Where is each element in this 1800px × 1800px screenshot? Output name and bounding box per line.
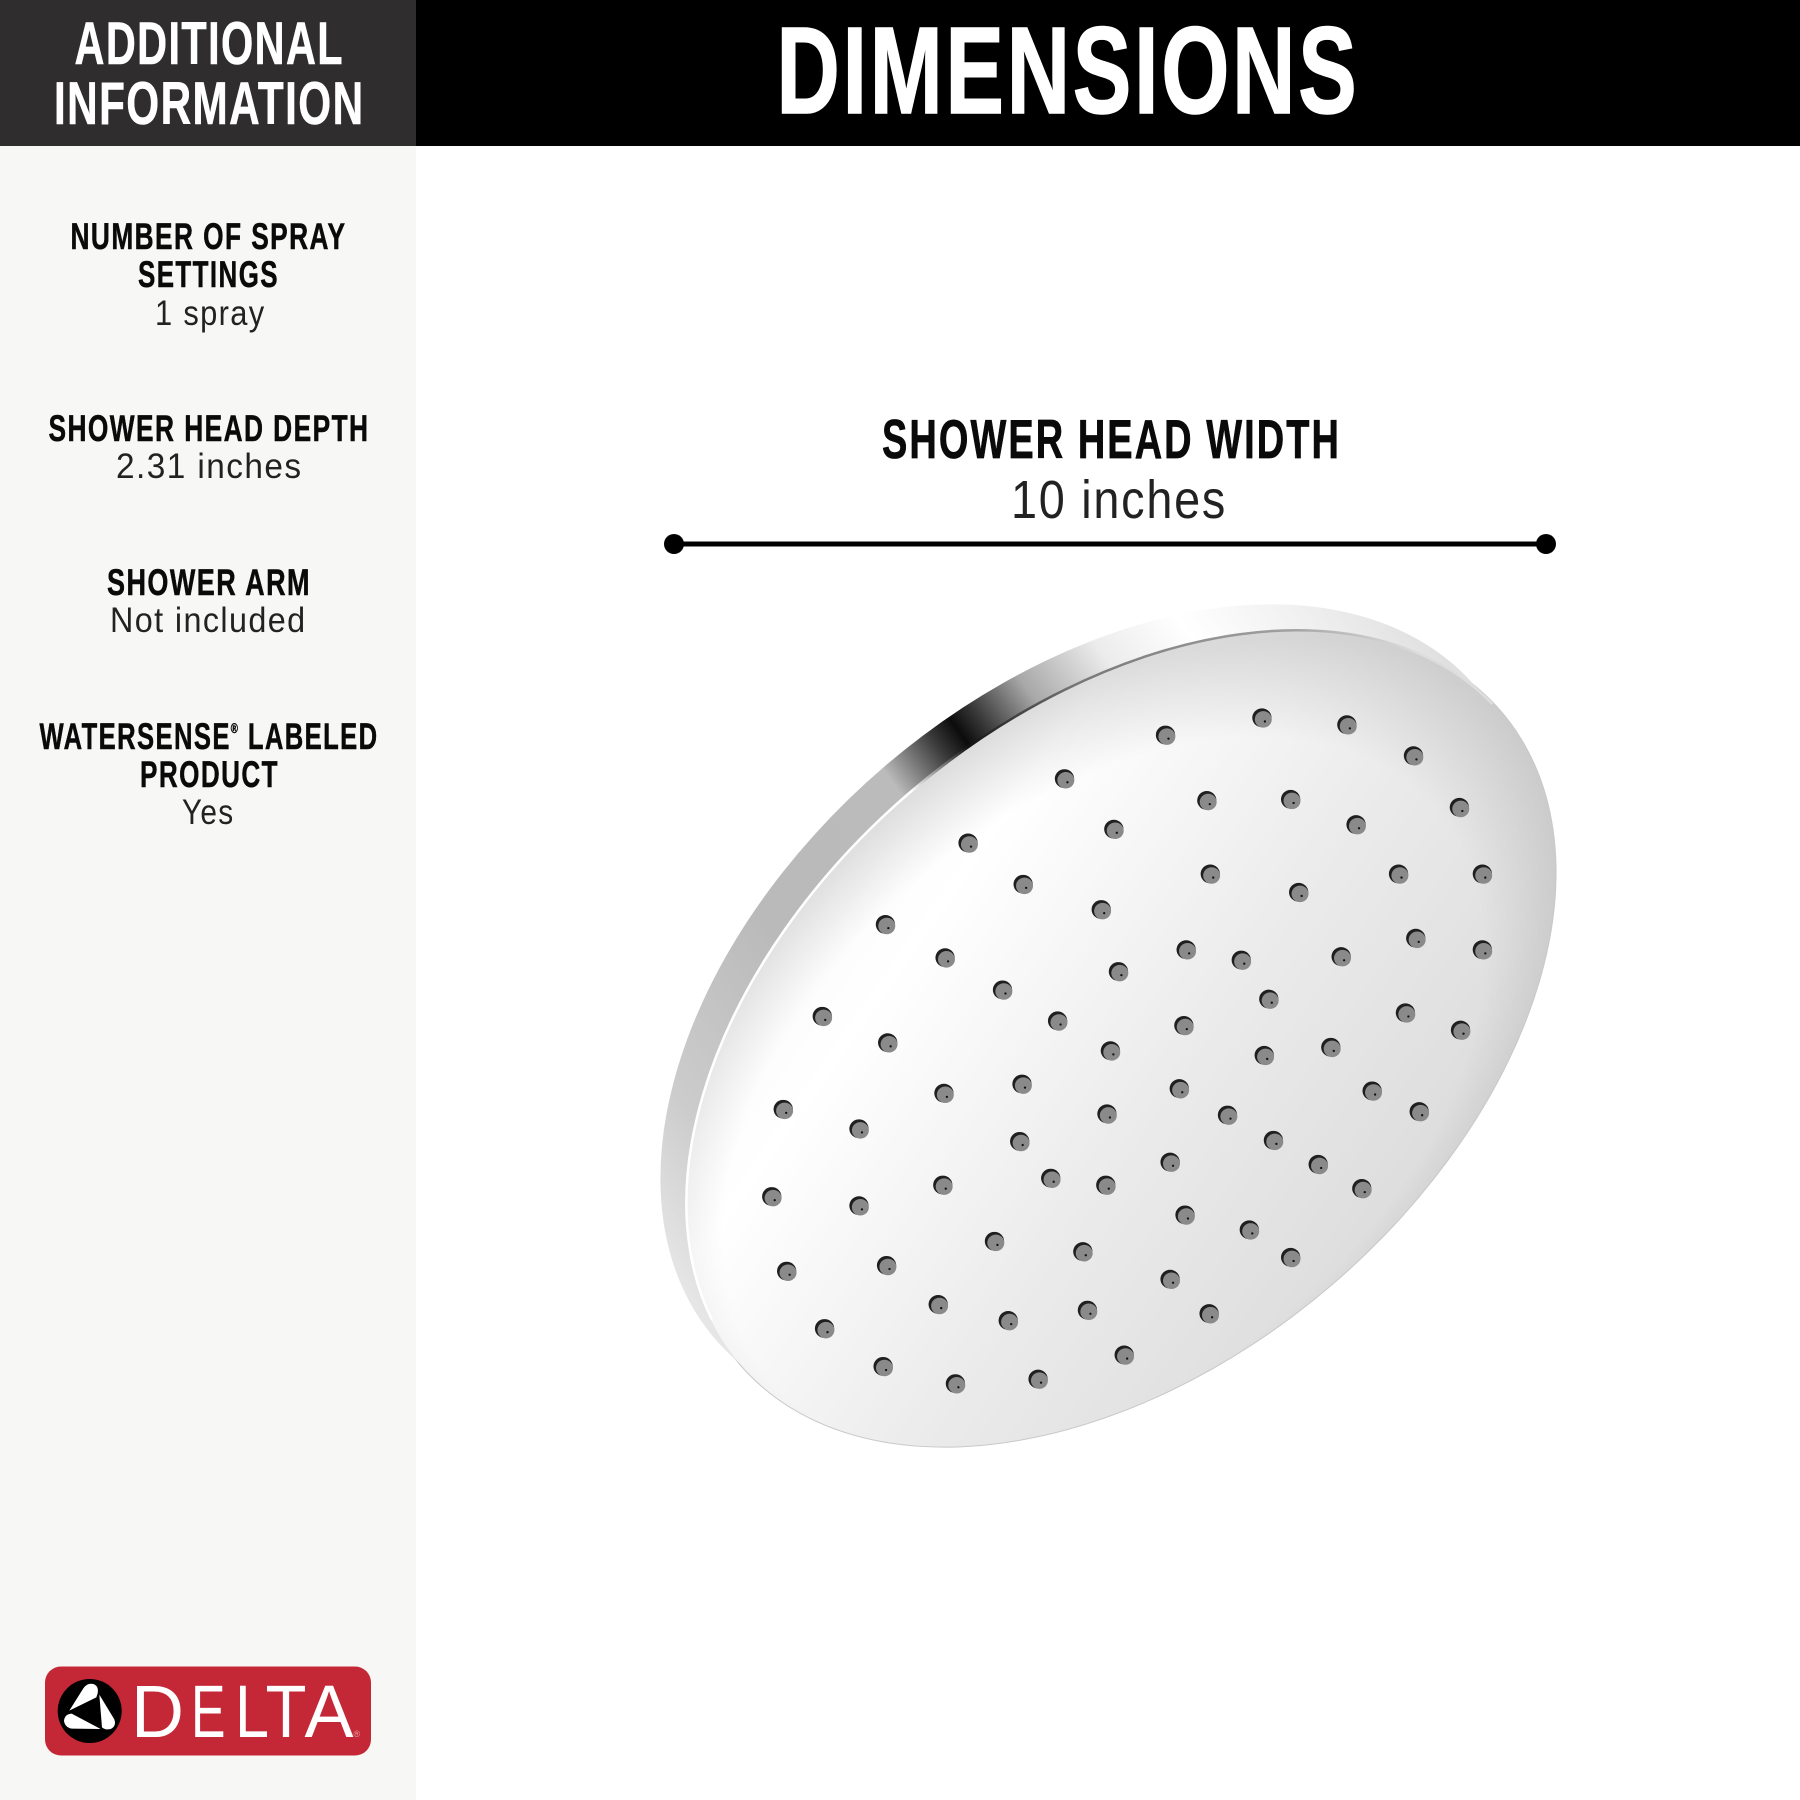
- item: shower arm: Not included: [110, 601, 306, 640]
- item: shower head depth: 2.31 inches: [116, 447, 302, 486]
- item: watersense labeled product: ®: [231, 720, 239, 736]
- wordmark: DELTA: D: [131, 1670, 184, 1753]
- item: watersense labeled product: Yes: [182, 793, 234, 832]
- panel: additional information sidebar: [0, 146, 416, 1800]
- item: watersense labeled product: WATERSENSE: [40, 716, 316, 757]
- item: watersense labeled product: [40, 716, 378, 832]
- wordmark: DELTA: E: [191, 1670, 226, 1753]
- item: shower arm: SHOWER ARM: [107, 562, 311, 603]
- dimension label: shower head width: SHOWER HEAD WIDTH: [882, 408, 1341, 470]
- shower head face: [529, 466, 1712, 1610]
- panel: additional information header: ADDITIONAL: [74, 10, 344, 77]
- title: dimensions header: [416, 0, 1800, 146]
- shower head rim: [504, 441, 1687, 1585]
- item: number of spray settings: [70, 216, 346, 333]
- dimension label: shower head width: 10 inches: [1011, 470, 1227, 530]
- wordmark: DELTA: A: [304, 1670, 354, 1753]
- logo: Delta: [45, 1666, 371, 1756]
- title: dimensions header: DIMENSIONS: [776, 3, 1360, 140]
- item: shower arm: [107, 562, 311, 640]
- item: watersense labeled product: PRODUCT: [140, 754, 279, 795]
- dimension label: shower head width: [882, 408, 1341, 530]
- icon: Delta triangle emblem: [58, 1679, 122, 1743]
- wordmark: DELTA: [131, 1670, 354, 1753]
- logo: Delta: ®: [354, 1729, 360, 1739]
- face edge shading: [529, 466, 1712, 1610]
- panel: additional information header: INFORMATION: [54, 70, 364, 137]
- outer edge line: [528, 464, 1713, 1612]
- item: shower head depth: [48, 408, 370, 486]
- spray nozzles: [762, 708, 1492, 1393]
- item: number of spray settings: 1 spray: [155, 294, 266, 333]
- item: shower head depth: SHOWER HEAD DEPTH: [48, 408, 370, 449]
- panel: additional information header: [0, 0, 416, 146]
- wordmark: DELTA: T: [266, 1670, 306, 1753]
- face edge highlight: [685, 629, 1493, 1320]
- dimension line with end dots: [664, 534, 1556, 554]
- wordmark: DELTA: L: [235, 1670, 269, 1753]
- item: number of spray settings: SETTINGS: [138, 254, 279, 295]
- illustration: round shower head: [660, 604, 1556, 1448]
- item: watersense labeled product: LABELED: [239, 716, 378, 757]
- item: number of spray settings: NUMBER OF SPRAY: [70, 216, 346, 257]
